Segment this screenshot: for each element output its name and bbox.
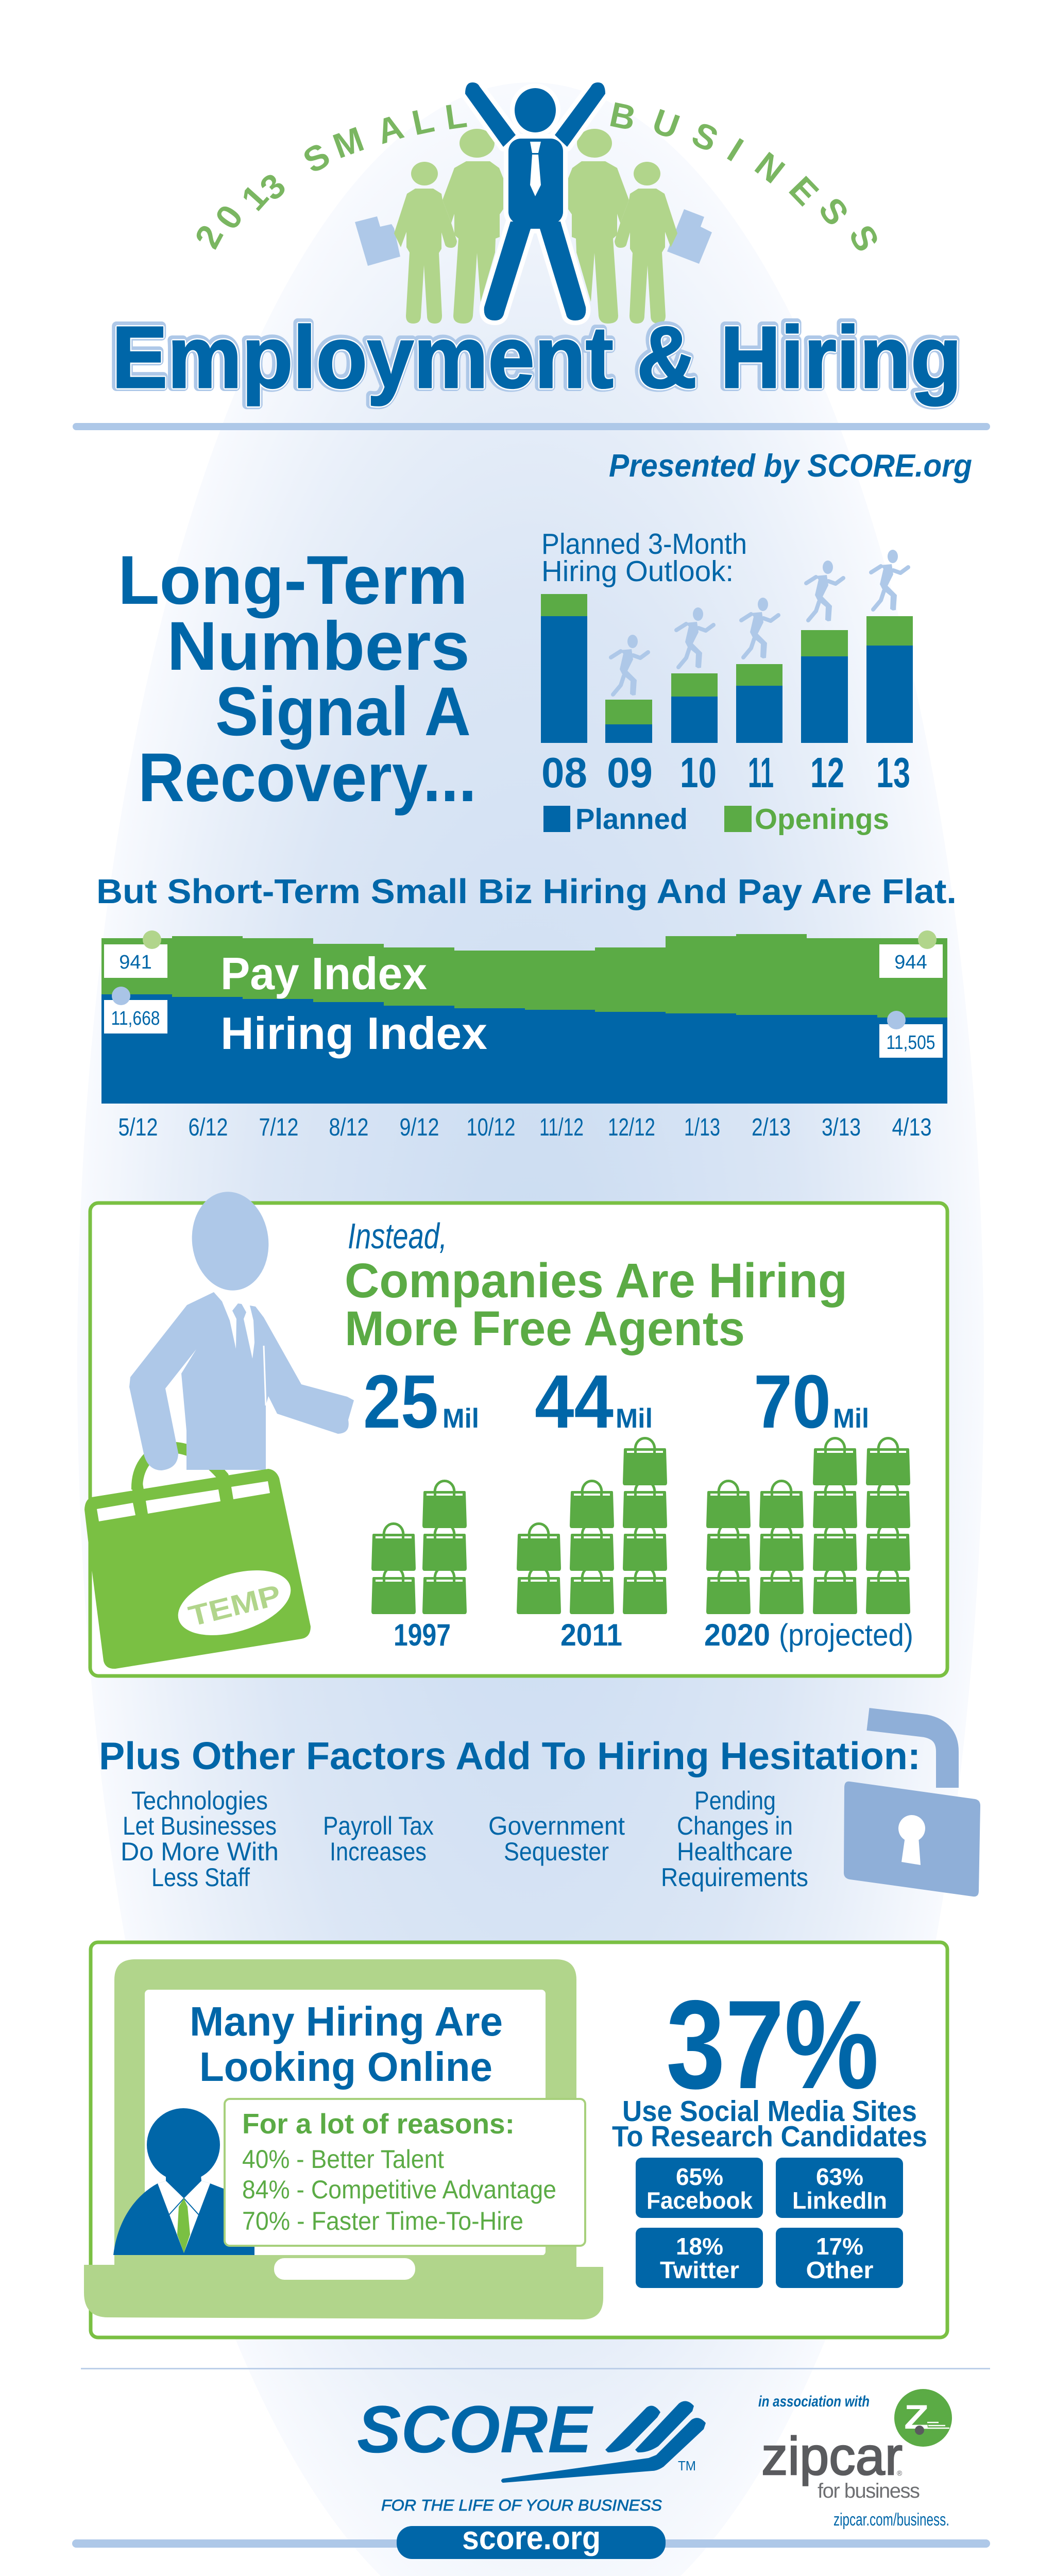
bar chart years — [541, 749, 910, 796]
curved title: 2013 Small Business: 0 — [208, 198, 251, 236]
stat: 37 percent: 37% — [666, 1974, 879, 2115]
callout list: 40% - Better Talent — [242, 2145, 444, 2174]
callout: reasons — [225, 2099, 585, 2246]
stat: 44 mil: 44 — [535, 1360, 614, 1444]
text: sequester factor — [488, 1811, 625, 1866]
stat box twitter: 18% — [676, 2233, 723, 2260]
value box 11,668 — [104, 987, 167, 1033]
logo: zipcar — [761, 2389, 952, 2502]
panel: free agents — [84, 1188, 947, 1676]
logo: SCORE: SCORE — [357, 2392, 593, 2467]
area chart date axis: 12/12 — [608, 1114, 655, 1141]
stat box other: 17% — [816, 2233, 863, 2260]
heading: many hiring online: Looking Online — [199, 2044, 492, 2090]
icon: person on screen — [113, 2108, 254, 2255]
stat: 25 mil: 25 — [363, 1360, 438, 1444]
curved title: 2013 Small Business: B — [606, 95, 639, 138]
icon: green team figures — [394, 129, 677, 324]
divider — [72, 2539, 990, 2548]
area chart date axis: 4/13 — [892, 1114, 931, 1141]
curved title: 2013 Small Business: N — [748, 145, 792, 191]
year labels: 1997 — [394, 1618, 451, 1652]
curved title: 2013 Small Business: U — [648, 101, 685, 147]
bar chart years: 10 — [680, 749, 717, 796]
curved title: 2013 Small Business: 2 — [187, 219, 231, 255]
area chart date axis: 9/12 — [400, 1114, 439, 1141]
chart title: hiring outlook — [541, 528, 747, 588]
stat box twitter — [636, 2228, 763, 2288]
button: score.org: score.org — [462, 2519, 601, 2556]
text: payroll factor: Increases — [330, 1837, 427, 1866]
area chart date axis: 1/13 — [684, 1114, 720, 1141]
heading: other factors: Plus Other Factors Add To Hiring Hesitation: — [99, 1734, 921, 1777]
curved title: 2013 Small Business: S — [686, 114, 724, 160]
curved title: 2013 Small Business: S — [297, 135, 336, 181]
text: social media — [612, 2095, 927, 2153]
pay index label: Pay Index — [220, 948, 427, 999]
heading: companies hiring free agents: More Free Agents — [345, 1301, 745, 1356]
value box 944: 944 — [894, 952, 927, 973]
curved title: 2013 Small Business: E — [781, 169, 826, 213]
text: healthcare factor: Requirements — [661, 1863, 808, 1892]
value box 944 — [879, 930, 943, 978]
icon: bags 2011 — [517, 1438, 667, 1614]
text: healthcare factor: Healthcare — [677, 1837, 793, 1866]
curved title: 2013 Small Business: L — [409, 100, 437, 143]
temp label: TEMP — [185, 1578, 284, 1633]
text: sequester factor: Sequester — [504, 1837, 609, 1866]
text: payroll factor: Payroll Tax — [323, 1811, 434, 1840]
curved title: 2013 Small Business: L — [443, 95, 469, 138]
icon: man with temp bag — [84, 1188, 354, 1669]
heading: many hiring online — [190, 1998, 503, 2090]
logo: SCORE: TM — [678, 2458, 696, 2473]
area chart: pay and hiring index — [101, 930, 947, 1104]
value box 11,505 — [879, 1011, 943, 1058]
callout list: 70% - Faster Time-To-Hire — [242, 2207, 523, 2235]
tagline: FOR THE LIFE OF YOUR BUSINESS — [381, 2496, 662, 2514]
chart legend: Openings — [755, 803, 889, 836]
year labels: 2011 — [560, 1618, 622, 1652]
curved title: 2013 Small Business: A — [372, 107, 408, 151]
bar chart years: 13 — [876, 749, 910, 796]
stat box other — [776, 2228, 903, 2288]
callout heading: For a lot of reasons: — [242, 2108, 515, 2140]
chart title: hiring outlook: Planned 3-Month — [541, 528, 747, 561]
text: instead: Instead, — [348, 1216, 447, 1256]
button: score.org — [397, 2519, 666, 2559]
stat box linkedin: LinkedIn — [792, 2187, 887, 2214]
hiring index label: Hiring Index — [220, 1008, 487, 1059]
text: technologies factor: Less Staff — [151, 1863, 250, 1892]
icon: bags 1997 — [371, 1481, 467, 1614]
stat box facebook — [636, 2158, 763, 2218]
bar chart years: 08 — [541, 749, 587, 796]
value box 11,668: 11,668 — [111, 1008, 160, 1029]
area chart date axis: 3/13 — [822, 1114, 861, 1141]
logo: SCORE — [357, 2392, 706, 2483]
stat box linkedin — [776, 2158, 903, 2218]
bar chart years: 12 — [810, 749, 844, 796]
area chart date axis: 8/12 — [329, 1114, 369, 1141]
text: healthcare factor: Changes in — [677, 1811, 793, 1840]
icon: documents — [355, 209, 712, 266]
bar chart years: 11 — [748, 749, 774, 796]
year labels: 2020 — [704, 1618, 770, 1652]
text: payroll factor — [323, 1811, 434, 1866]
text: social media: To Research Candidates — [612, 2120, 927, 2153]
icon: blue hero figure — [465, 82, 605, 320]
stat: 44 mil: Mil — [616, 1403, 653, 1434]
area chart date axis: 11/12 — [539, 1114, 584, 1141]
value box 941 — [104, 930, 167, 978]
heading: long-term numbers — [118, 542, 477, 816]
stat: 70 mil: Mil — [833, 1403, 869, 1434]
callout list — [242, 2145, 556, 2235]
title: Employment & Hiring: Employment & Hiring — [112, 309, 962, 406]
heading: short-term flat: But Short-Term Small Biz Hiring And Pay Are Flat. — [96, 872, 957, 911]
callout list: 84% - Competitive Advantage — [242, 2175, 556, 2204]
curved title: 2013 Small Business: I — [721, 131, 750, 169]
area chart date axis: 6/12 — [189, 1114, 228, 1141]
curved title: 2013 Small Business: S — [811, 191, 856, 232]
heading: long-term numbers: Long-Term — [118, 542, 468, 619]
curved title: 2013 Small Business: M — [328, 120, 369, 166]
text: in association with: in association with — [758, 2393, 870, 2410]
stat: 70 mil: 70 — [754, 1360, 831, 1444]
text: technologies factor — [121, 1786, 279, 1892]
text: technologies factor: Technologies — [131, 1786, 268, 1815]
chart legend — [543, 803, 889, 836]
area chart date axis: 5/12 — [118, 1114, 158, 1141]
text: healthcare factor: Pending — [694, 1786, 776, 1815]
title: Employment & Hiring: Employment & Hiring — [112, 309, 962, 406]
year labels: (projected) — [779, 1618, 913, 1652]
text: healthcare factor — [661, 1786, 808, 1892]
logo: zipcar: zipcar — [761, 2427, 903, 2486]
bar chart: planned vs openings — [541, 594, 913, 743]
heading: long-term numbers: Recovery... — [138, 739, 477, 816]
curved title: 2013 Small Business: 3 — [252, 166, 293, 208]
text: zipcar url: zipcar.com/business. — [833, 2510, 949, 2530]
text: technologies factor: Let Businesses — [123, 1811, 277, 1840]
logo: zipcar: for business — [818, 2480, 920, 2502]
area chart date axis: 2/13 — [752, 1114, 791, 1141]
heading: many hiring online: Many Hiring Are — [190, 1998, 503, 2044]
bar chart years: 09 — [607, 749, 653, 796]
icon: laptop — [84, 1959, 603, 2319]
chart legend: Planned — [575, 803, 688, 836]
curved title: 2013 Small Business: 1 — [234, 177, 276, 218]
logo: zipcar: Z — [904, 2398, 929, 2436]
stat box facebook: 65% — [676, 2163, 723, 2190]
icon: runners climbing — [611, 550, 908, 696]
logo: zipcar: ® — [897, 2469, 903, 2477]
heading: long-term numbers: Signal A — [215, 673, 471, 750]
stat box linkedin: 63% — [816, 2163, 863, 2190]
area chart date axis: 7/12 — [259, 1114, 299, 1141]
curved title: 2013 Small Business: S — [841, 219, 887, 258]
panel: looking online — [84, 1942, 947, 2337]
chart title: hiring outlook: Hiring Outlook: — [541, 555, 734, 588]
text: social media: Use Social Media Sites — [622, 2095, 917, 2128]
curved title: 2013 Small Business — [187, 95, 887, 258]
divider — [73, 423, 990, 430]
icon: bags 2020 — [706, 1438, 910, 1614]
year labels — [394, 1618, 913, 1652]
area chart date axis: 10/12 — [467, 1114, 515, 1141]
stat: 25 mil: Mil — [443, 1403, 479, 1434]
value box 941: 941 — [119, 952, 152, 973]
stat box twitter: Twitter — [660, 2257, 739, 2283]
icon: open padlock — [844, 1719, 980, 1896]
title: Employment & Hiring: Employment & Hiring — [111, 308, 961, 405]
value box 11,505: 11,505 — [886, 1032, 935, 1054]
stat box facebook: Facebook — [646, 2187, 753, 2214]
stat box other: Other — [806, 2257, 874, 2283]
text: sequester factor: Government — [488, 1811, 625, 1840]
area chart date axis — [118, 1114, 931, 1141]
presented by: Presented by SCORE.org — [609, 448, 972, 484]
text: technologies factor: Do More With — [121, 1837, 279, 1866]
heading: long-term numbers: Numbers — [167, 608, 470, 685]
heading: companies hiring free agents: Companies Are Hiring — [345, 1253, 847, 1308]
heading: companies hiring free agents — [345, 1253, 847, 1356]
